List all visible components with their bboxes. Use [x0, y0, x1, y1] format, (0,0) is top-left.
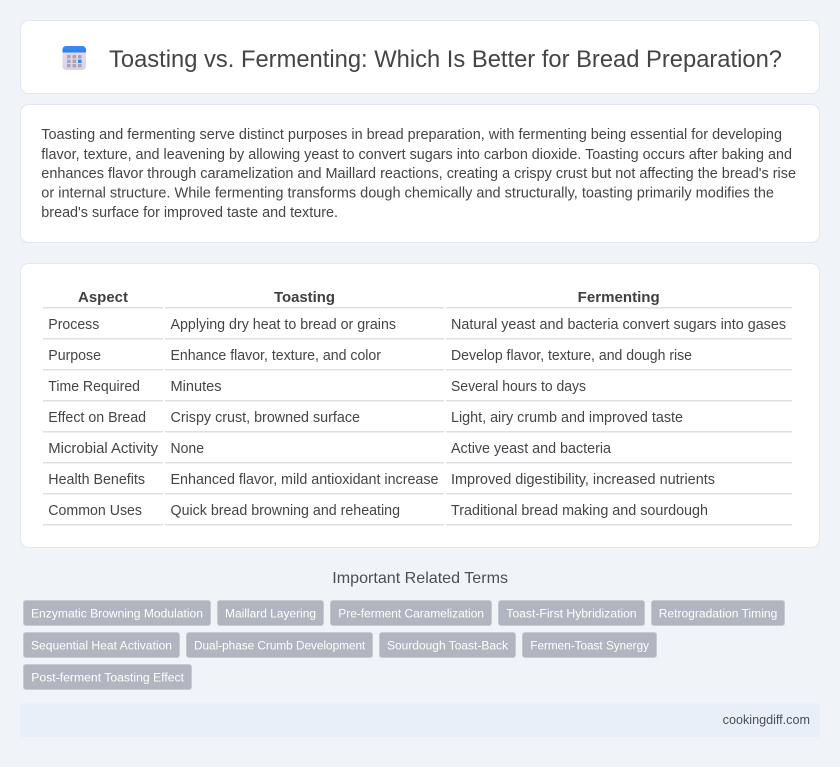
tag	[24, 664, 192, 690]
row: common uses: Traditional bread making and sourdough	[451, 503, 708, 519]
row: microbial activity	[43, 441, 792, 464]
intro paragraph: or internal structure. While fermenting transforms dough chemically and structurally, toasting primarily modifies the	[41, 186, 774, 202]
tag	[218, 600, 324, 626]
tag: Sourdough Toast-Back	[387, 638, 509, 652]
row: health benefits: Enhanced flavor, mild antioxidant increase	[170, 472, 438, 488]
intro paragraph: enhances flavor through caramelization and Maillard reactions, creating a crispy crust but not affecting the bread's rise	[41, 166, 796, 182]
row: microbial activity: Active yeast and bacteria	[451, 441, 611, 457]
intro paragraph: flavor, texture, and leavening by allowing yeast to convert sugars into carbon dioxide. Toasting occurs after baking and	[41, 147, 792, 163]
tag: Post-ferment Toasting Effect	[31, 670, 185, 684]
row: health benefits: Health Benefits	[48, 472, 145, 488]
row: time required: Several hours to days	[451, 379, 586, 395]
row: health benefits	[43, 472, 792, 494]
row: time required: Minutes	[170, 379, 222, 395]
row: health benefits: Improved digestibility, increased nutrients	[451, 472, 715, 488]
intro paragraph	[41, 127, 796, 221]
row: purpose	[43, 348, 792, 370]
tag: Retrogradation Timing	[659, 606, 777, 620]
footer source text: cookingdiff.com	[723, 713, 810, 727]
tag	[498, 600, 644, 626]
intro paragraph: bread's surface for improved taste and texture.	[41, 205, 338, 221]
row: effect on bread: Light, airy crumb and improved taste	[451, 410, 683, 426]
panel: comparison table	[20, 264, 820, 548]
tag: Pre-ferment Caramelization	[338, 606, 484, 620]
tag	[186, 632, 372, 658]
icon: calendar	[62, 46, 86, 70]
panel: introduction	[20, 104, 820, 242]
row: purpose: Enhance flavor, texture, and color	[170, 348, 381, 364]
row: effect on bread: Effect on Bread	[48, 410, 146, 426]
tag	[24, 632, 180, 658]
row: common uses	[43, 503, 792, 526]
intro paragraph: Toasting and fermenting serve distinct purposes in bread preparation, with fermenting being essential for developing	[41, 127, 782, 143]
row: effect on bread	[43, 410, 792, 432]
table header row: Fermenting	[578, 289, 660, 306]
header panel	[20, 20, 820, 94]
row: time required	[43, 379, 792, 402]
footer	[20, 703, 820, 737]
related terms tags	[24, 600, 784, 690]
table header row: Aspect	[78, 289, 128, 306]
tag: Maillard Layering	[225, 606, 316, 620]
row: time required: Time Required	[48, 379, 140, 395]
tag	[522, 632, 656, 658]
title: Toasting vs. Fermenting: Which Is Better for Bread Preparation?	[109, 46, 782, 73]
row: purpose: Purpose	[48, 348, 101, 364]
row: microbial activity: None	[170, 441, 204, 457]
tag: Enzymatic Browning Modulation	[31, 606, 203, 620]
row: process: Natural yeast and bacteria convert sugars into gases	[451, 317, 786, 333]
row: process: Applying dry heat to bread or grains	[170, 317, 396, 333]
row: process: Process	[48, 317, 99, 333]
tag: Dual-phase Crumb Development	[194, 638, 366, 652]
tag: Toast-First Hybridization	[506, 606, 637, 620]
tag	[652, 600, 784, 626]
tag	[24, 600, 210, 626]
row: microbial activity: Microbial Activity	[48, 441, 159, 457]
row: effect on bread: Crispy crust, browned surface	[170, 410, 360, 426]
tag	[330, 600, 492, 626]
tag	[380, 632, 516, 658]
row: common uses: Common Uses	[48, 503, 142, 519]
table header row	[43, 289, 792, 308]
row: process	[43, 317, 792, 340]
table header row: Toasting	[274, 289, 335, 306]
row: common uses: Quick bread browning and reheating	[170, 503, 400, 519]
tag: Fermen-Toast Synergy	[530, 638, 650, 652]
row: purpose: Develop flavor, texture, and dough rise	[451, 348, 692, 364]
tag: Sequential Heat Activation	[31, 638, 172, 652]
heading: important related terms: Important Related Terms	[332, 570, 508, 587]
